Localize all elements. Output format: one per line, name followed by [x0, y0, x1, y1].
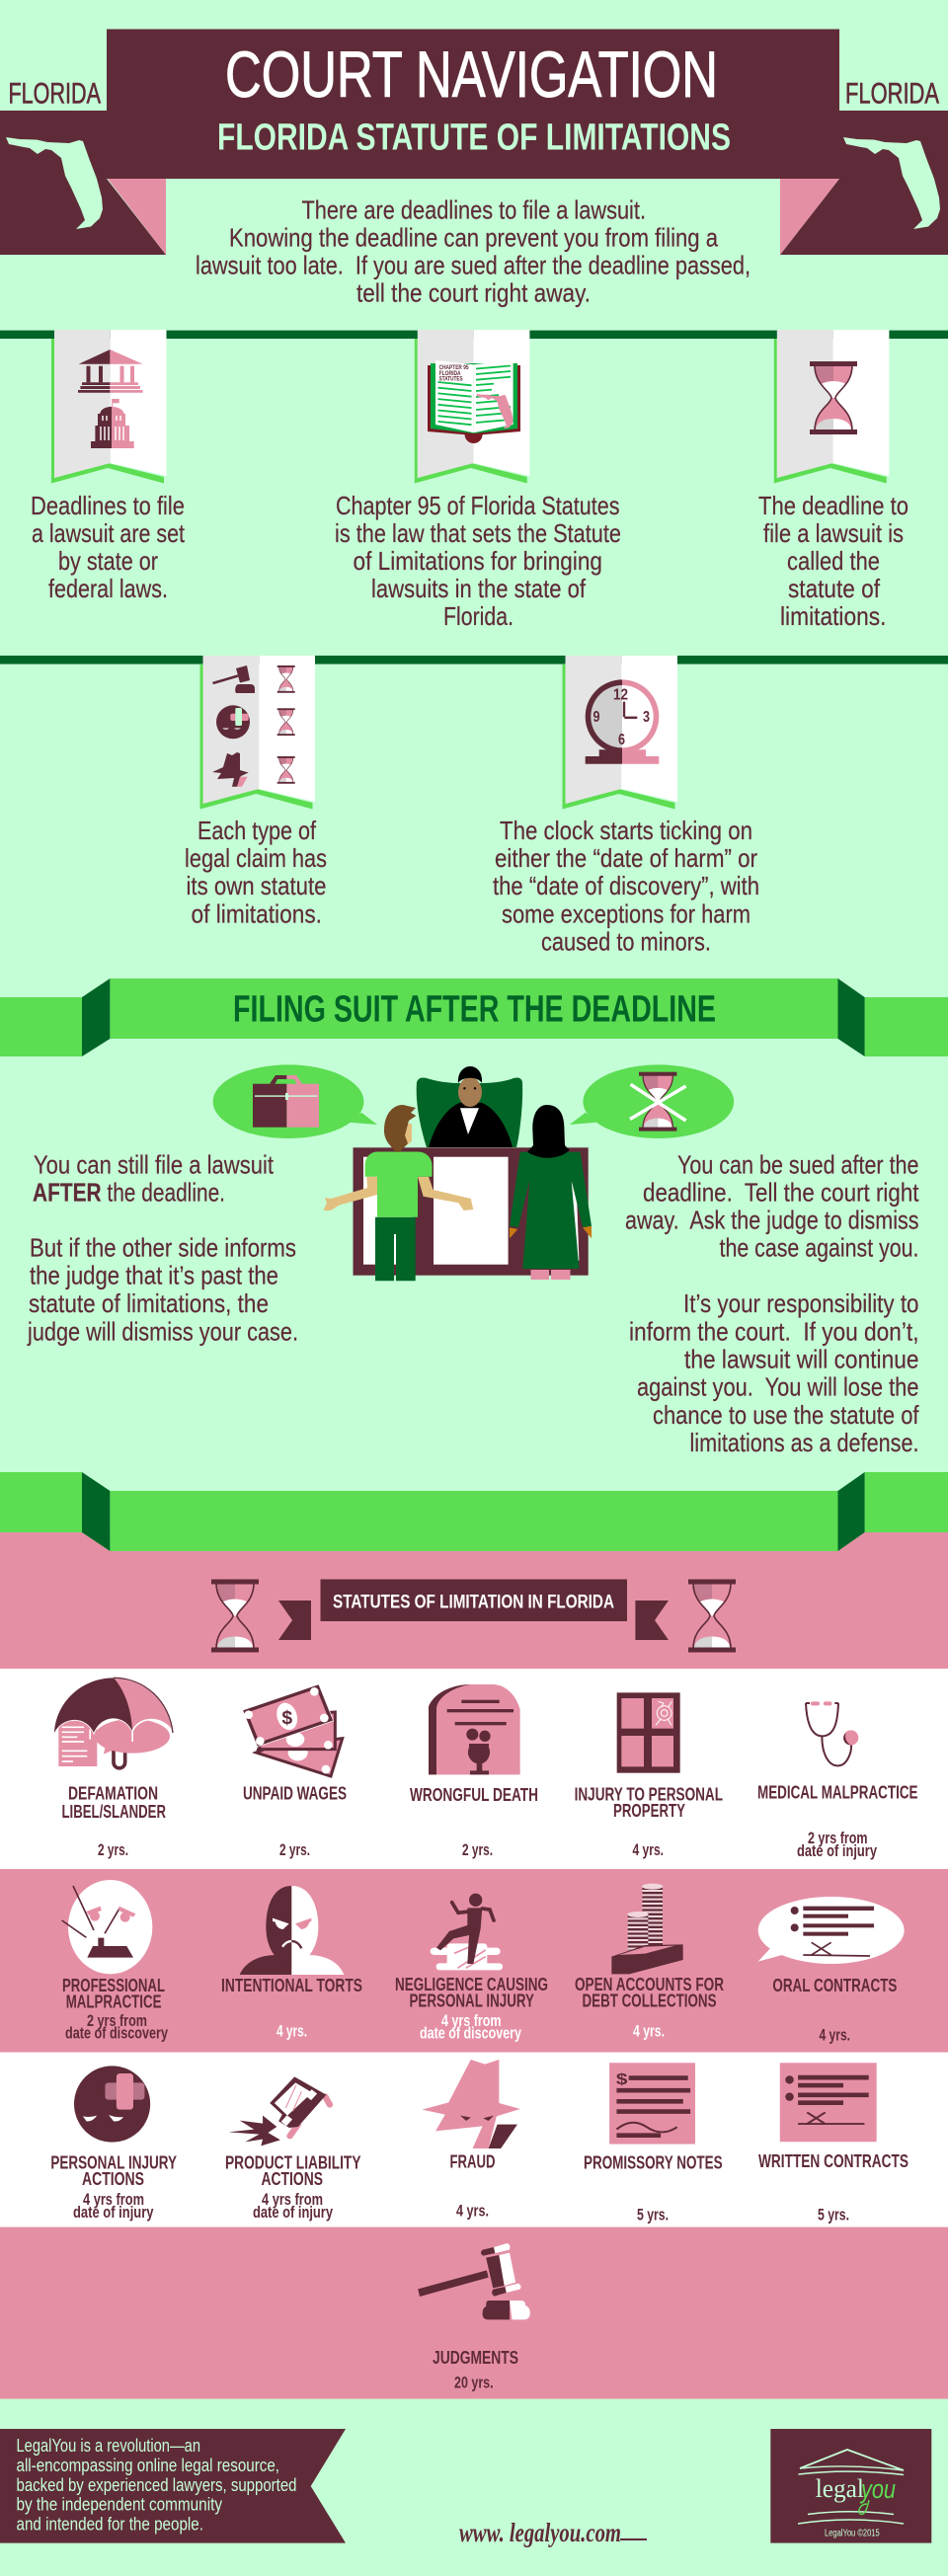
speech bubble: briefcase — [213, 1064, 377, 1138]
text: either the “date of harm” or — [495, 843, 757, 873]
text: The clock starts ticking on — [500, 816, 752, 845]
text: filing after the deadline: the judge that it’s past the — [30, 1261, 278, 1290]
icon: bandaged head — [74, 2066, 150, 2143]
header banner — [0, 30, 948, 255]
logo: LegalYou: LegalYou ©2015 — [825, 2528, 880, 2538]
label — [410, 1784, 538, 1859]
text: a lawsuit are set — [32, 518, 186, 548]
item: open accounts — [575, 1884, 724, 2041]
icon: promissory note: $ — [616, 2070, 628, 2088]
label: NEGLIGENCE CAUSING — [395, 1974, 548, 1994]
label: ACTIONS — [261, 2168, 323, 2189]
label — [61, 1783, 166, 1859]
divider stripe row 2 — [0, 656, 948, 664]
text — [758, 491, 908, 631]
label: MALPRACTICE — [66, 1991, 162, 2012]
item: product liability — [225, 2076, 361, 2222]
label: INJURY TO PERSONAL — [575, 1783, 723, 1804]
plaintiff — [324, 1105, 473, 1281]
label — [225, 2152, 361, 2222]
judge desk — [354, 1147, 589, 1276]
footer ribbon: by the independent community — [16, 2495, 222, 2515]
label: date of injury — [73, 2204, 154, 2222]
banner: filing suit after the deadline: FILING SUIT AFTER THE DEADLINE — [233, 989, 716, 1031]
item: wrongful death — [410, 1684, 538, 1859]
icon: federal courthouse — [78, 350, 143, 393]
panel: statute of limitations definition — [758, 330, 908, 631]
item: promissory notes — [584, 2063, 723, 2224]
logo: LegalYou: legal — [816, 2474, 864, 2503]
panel: chapter 95 — [335, 330, 621, 631]
label: 4 yrs from — [83, 2191, 144, 2209]
text: The deadline to — [758, 491, 908, 520]
panel: legal claim types — [185, 656, 327, 928]
title: COURT NAVIGATION — [225, 38, 718, 111]
icon: clock: 3 — [643, 709, 650, 726]
icon: clock: 9 — [592, 709, 600, 726]
icon: small gavel — [213, 665, 255, 693]
item: oral contracts — [758, 1897, 905, 2044]
icon: clock — [586, 679, 659, 764]
label: LIBEL/SLANDER — [61, 1801, 166, 1822]
text: caused to minors. — [541, 927, 711, 957]
label: JUDGMENTS — [433, 2347, 518, 2368]
label — [575, 1783, 723, 1859]
icon: Florida map right — [843, 137, 940, 229]
icon: state capitol — [91, 399, 134, 448]
label: 4 yrs. — [820, 2026, 850, 2044]
panel: clock starts — [493, 656, 759, 957]
label — [243, 1783, 347, 1859]
label: DEFAMATION — [68, 1783, 158, 1804]
text: the “date of discovery”, with — [493, 871, 759, 900]
footer ribbon: all-encompassing online legal resource, — [16, 2456, 279, 2475]
text: lawsuits in the state of — [371, 574, 587, 603]
text: filing after the deadline: But if the other side informs — [30, 1232, 296, 1262]
icon: face with gavel — [62, 1880, 152, 1974]
logo: LegalYou — [770, 2429, 931, 2543]
intro text: tell the court right away. — [356, 278, 591, 308]
icon: coin stacks — [611, 1884, 683, 1974]
icon: Florida map left — [6, 137, 103, 229]
icon: small hourglasses — [277, 665, 295, 784]
label: PERSONAL INJURY — [50, 2152, 177, 2173]
text: Chapter 95 of Florida Statutes — [336, 491, 620, 520]
text: statute of — [788, 574, 881, 603]
icon: slip and fall — [431, 1894, 503, 1970]
label — [584, 2152, 723, 2224]
label: 4 yrs from — [262, 2191, 323, 2209]
label: PROPERTY — [613, 1800, 685, 1821]
icon: stethoscope — [806, 1701, 858, 1765]
label: OPEN ACCOUNTS FOR — [575, 1974, 724, 1994]
intro text: There are deadlines to file a lawsuit. — [302, 195, 646, 224]
text: being sued after the deadline — [625, 1150, 919, 1457]
speech bubble: crossed hourglass — [570, 1064, 734, 1138]
text: some exceptions for harm — [502, 898, 750, 928]
item: injury to personal property — [575, 1692, 723, 1859]
icon: statute book — [428, 360, 520, 443]
label: PRODUCT LIABILITY — [225, 2152, 361, 2173]
text: limitations. — [780, 601, 887, 631]
text: filing after the deadline — [27, 1150, 298, 1347]
label: 2 yrs. — [98, 1841, 128, 1859]
label — [395, 1974, 548, 2043]
item: personal injury actions — [50, 2066, 177, 2222]
subtitle: FLORIDA STATUTE OF LIMITATIONS — [217, 117, 731, 158]
intro text: lawsuit too late. If you are sued after the deadline passed, — [196, 250, 750, 279]
label: 4 yrs. — [276, 2023, 307, 2041]
text: of Limitations for bringing — [354, 546, 602, 576]
label — [62, 1975, 169, 2043]
panel: deadlines — [31, 330, 186, 603]
label — [575, 1974, 724, 2041]
text: Each type of — [198, 816, 317, 845]
text: by state or — [58, 546, 158, 576]
icon: money — [244, 1686, 343, 1776]
footer ribbon: and intended for the people. — [16, 2515, 203, 2535]
icon: statute book: FLORIDA — [439, 371, 461, 377]
icon: hat and collar figure — [422, 2060, 520, 2148]
label: date of discovery — [65, 2025, 169, 2043]
footer ribbon: backed by experienced lawyers, supported — [16, 2475, 296, 2495]
label — [757, 1782, 918, 1860]
label — [50, 2152, 177, 2222]
label: 2 yrs. — [279, 1841, 310, 1859]
icon: statute book: CHAPTER 95 — [439, 365, 469, 371]
item: judgments — [418, 2243, 530, 2391]
text: its own statute — [186, 871, 326, 900]
section bands — [0, 1472, 948, 2399]
icon: hourglass — [810, 361, 857, 434]
item: written contracts — [758, 2063, 908, 2224]
item: unpaid wages — [243, 1686, 347, 1859]
text: file a lawsuit is — [763, 518, 904, 548]
item: medical malpractice — [757, 1701, 918, 1860]
label: ACTIONS — [82, 2168, 144, 2189]
icon: tombstone — [429, 1684, 520, 1774]
text: is the law that sets the Statute — [335, 518, 621, 548]
label: 2 yrs from — [87, 2012, 147, 2030]
text: filing after the deadline: judge will dismiss your case. — [27, 1317, 298, 1347]
label: date of injury — [797, 1842, 878, 1860]
item: professional malpractice — [62, 1880, 169, 2043]
item: negligence — [395, 1894, 548, 2043]
text: called the — [787, 546, 880, 576]
icon: clock: 6 — [618, 732, 625, 748]
divider stripe row 1 — [0, 331, 948, 339]
item: intentional torts — [221, 1886, 362, 2041]
footer ribbon: LegalYou is a revolution—an — [16, 2436, 200, 2456]
label: 2 yrs from — [808, 1830, 867, 1847]
intro text: Knowing the deadline can prevent you from filing a — [229, 223, 718, 253]
judge chair — [417, 1078, 522, 1147]
logo: LegalYou: you — [859, 2474, 896, 2504]
label: 5 yrs. — [637, 2206, 669, 2224]
label: FRAUD — [450, 2151, 496, 2172]
label — [433, 2347, 518, 2391]
label — [772, 1975, 897, 2044]
illustration: courtroom — [324, 1066, 592, 1281]
icon: written contract — [780, 2063, 877, 2142]
icon: crashing car — [228, 2076, 330, 2146]
icon: small injured head — [216, 705, 250, 739]
label: date of discovery — [420, 2025, 522, 2043]
text: Florida. — [443, 601, 514, 631]
label: PROMISSORY NOTES — [584, 2152, 723, 2173]
text: filing after the deadline: You can still file a lawsuit — [34, 1150, 275, 1180]
icon: speech bubble contract — [758, 1897, 905, 1964]
text: of limitations. — [192, 898, 322, 928]
icon: clock: 12 — [613, 687, 628, 703]
icon: money: $ — [281, 1708, 292, 1729]
item: fraud — [422, 2060, 520, 2221]
label: 4 yrs from — [441, 2012, 502, 2030]
label: DEBT COLLECTIONS — [583, 1991, 717, 2010]
text: being sued after the deadline: the lawsuit will continue — [684, 1345, 918, 1374]
defendant — [510, 1105, 592, 1280]
website url: www. legalyou.com — [459, 2518, 621, 2547]
label — [221, 1975, 362, 2041]
label: WRONGFUL DEATH — [410, 1784, 538, 1805]
text — [185, 816, 327, 928]
icon: umbrella — [54, 1678, 173, 1768]
label: 2 yrs. — [462, 1841, 493, 1859]
text: filing after the deadline: statute of limitations, the — [29, 1288, 269, 1318]
label: UNPAID WAGES — [243, 1783, 347, 1804]
label: PERSONAL INJURY — [409, 1991, 534, 2010]
text — [31, 491, 186, 603]
label: ORAL CONTRACTS — [772, 1975, 897, 1995]
label: 4 yrs. — [456, 2203, 489, 2221]
label: date of injury — [253, 2204, 334, 2222]
state label left: FLORIDA — [8, 77, 101, 110]
heading: statutes of limitation in Florida — [211, 1580, 736, 1653]
label — [450, 2151, 496, 2221]
text: filing after the deadline: AFTER the deadline. — [33, 1177, 225, 1207]
label: 5 yrs. — [818, 2206, 849, 2224]
icon: small fraud hat — [212, 752, 249, 787]
item: defamation — [54, 1678, 173, 1859]
intro text — [196, 195, 750, 308]
icon: broken window — [617, 1692, 680, 1773]
judge — [429, 1066, 513, 1147]
label: PROFESSIONAL — [62, 1975, 165, 1995]
label: INTENTIONAL TORTS — [221, 1975, 362, 1995]
label: 4 yrs. — [632, 1841, 664, 1859]
icon: promissory note — [609, 2063, 695, 2145]
text — [335, 491, 621, 631]
text: federal laws. — [48, 574, 168, 603]
icon: angry face — [240, 1886, 344, 1975]
icon: statute book: STATUTES — [439, 377, 463, 383]
text: Deadlines to file — [31, 491, 185, 520]
label — [758, 2150, 908, 2224]
banner: filing suit after the deadline — [0, 978, 948, 1056]
heading: statutes of limitation in Florida: STATUTES OF LIMITATION IN FLORIDA — [333, 1592, 614, 1613]
label: 20 yrs. — [454, 2374, 494, 2391]
label: 4 yrs. — [633, 2023, 665, 2041]
icon: gavel — [418, 2243, 530, 2319]
text — [493, 816, 759, 957]
footer ribbon — [0, 2429, 346, 2543]
text: legal claim has — [185, 843, 327, 873]
